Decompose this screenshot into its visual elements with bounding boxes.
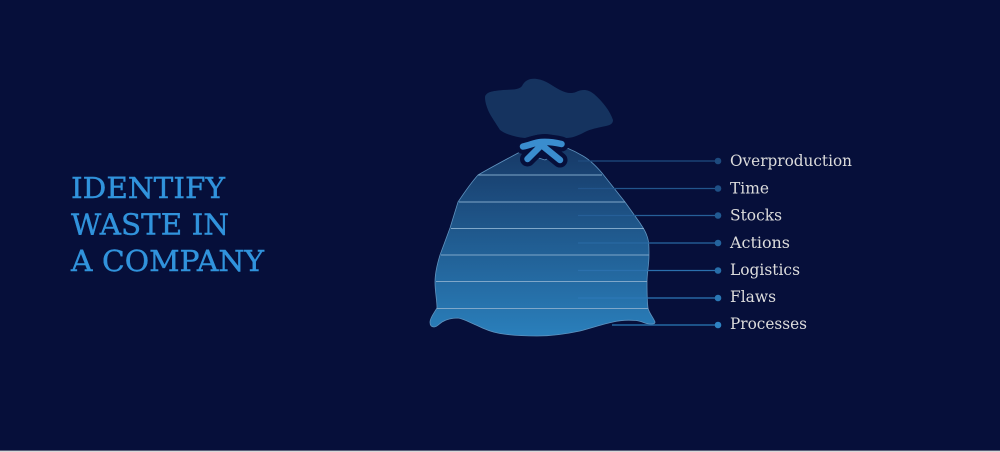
leader: processes: [612, 322, 721, 328]
title: A COMPANY: [70, 244, 265, 278]
leader: overproduction: [578, 158, 721, 164]
label: logistics: Logistics: [730, 260, 800, 279]
title: [70, 171, 265, 278]
leader: stocks: [578, 212, 721, 219]
bag body: [430, 148, 655, 336]
label: processes: Processes: [730, 314, 807, 333]
leader: flaws: [578, 295, 721, 301]
labels: [729, 151, 852, 333]
title: WASTE IN: [71, 208, 229, 242]
band dividers: [436, 175, 649, 308]
label: time: Time: [730, 178, 769, 198]
label: actions: Actions: [729, 233, 790, 252]
bag top: [485, 79, 613, 138]
label: overproduction: Overproduction: [730, 151, 852, 170]
title: IDENTIFY: [71, 171, 226, 205]
leader: actions: [578, 240, 721, 246]
label: flaws: Flaws: [730, 287, 776, 306]
leader: logistics: [578, 267, 721, 274]
leader: time: [578, 185, 721, 192]
knot: [523, 142, 562, 160]
label: stocks: Stocks: [730, 206, 782, 224]
leader lines: [578, 158, 721, 328]
icon: waste bag: [430, 79, 655, 336]
